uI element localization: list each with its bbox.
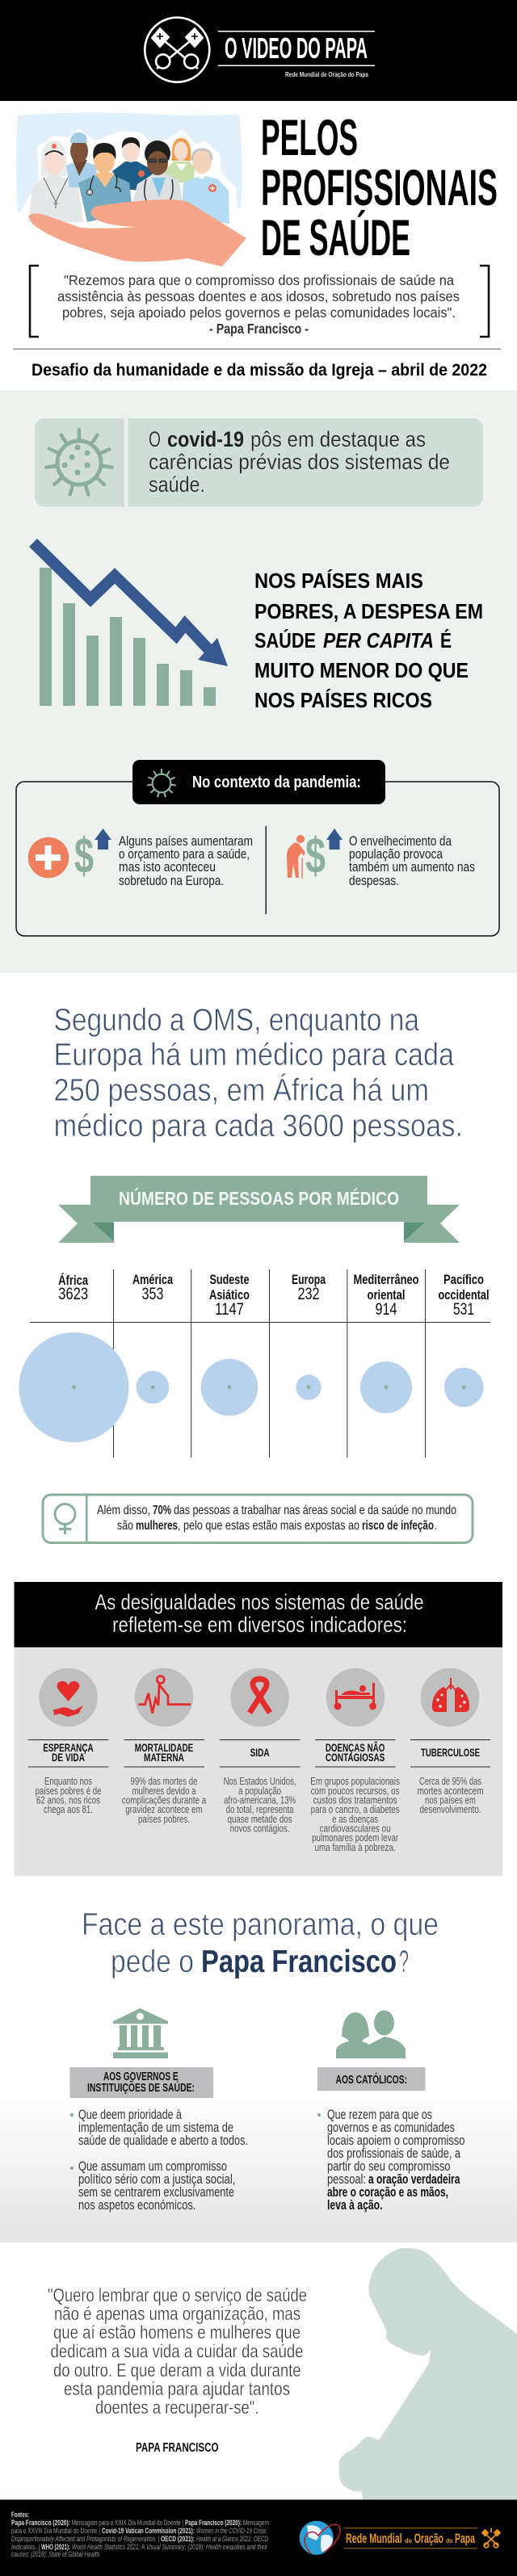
indicator: sida: afro-americana, 13% (224, 1794, 296, 1806)
sources: Fontes: (11, 2511, 29, 2519)
closing quote: PAPA FRANCISCO (136, 2441, 219, 2455)
indicator: doenças não contagiosas: e as doenças (332, 1814, 378, 1825)
text: ageing: população provoca (349, 847, 443, 862)
logo wordmark: O VIDEO DO PAPA (225, 31, 368, 65)
indicator: tuberculose: Cerca de 95% das (419, 1776, 481, 1787)
chart: people per doctor by region: 3623 (58, 1285, 88, 1303)
indicator: doenças não contagiosas: cardiovasculares ou (320, 1823, 391, 1835)
text: budget: sobretudo na Europa. (119, 874, 224, 888)
indicator: mortalidade materna: MATERNA (144, 1752, 184, 1764)
closing quote: doentes a recuperar-se". (95, 2397, 258, 2418)
statement: doctors per person: médico para cada 3600 pessoas. (53, 1109, 463, 1143)
icon: ageing population cost up (287, 829, 343, 884)
callout: women in health workforce: risco de infeção (362, 1519, 434, 1533)
indicator: sida: novos contágios. (230, 1823, 290, 1835)
callout: women in health workforce: , pelo que estas estão mais expostas ao (178, 1519, 359, 1533)
panel: what the Pope asks (0, 1907, 517, 2242)
heading: spending per capita: NOS PAÍSES MAIS (254, 568, 423, 593)
prayer intention quote in brackets: "Rezemos para que o compromisso dos profissionais de saúde na (64, 272, 454, 288)
statement: doctors per person: 250 pessoas, em África há um (53, 1073, 429, 1108)
chart: people per doctor by region: 531 (453, 1300, 474, 1319)
covid text: O (149, 427, 161, 451)
indicator: esperança de vida: 62 anos, nos ricos (36, 1794, 100, 1806)
indicator: sida: do total, representa (226, 1804, 294, 1815)
indicator: tuberculose: desenvolvimento. (420, 1804, 481, 1815)
section heading: Papa Francisco (201, 1945, 397, 1979)
heading: spending per capita: NOS PAÍSES RICOS (254, 688, 432, 712)
list: requests to catholics (317, 2108, 465, 2213)
callout: covid-19 (35, 418, 483, 507)
chart: people per doctor by region: Mediterrâneo (354, 1272, 418, 1287)
panel heading: refletem-se em diversos indicadores: (112, 1613, 407, 1637)
indicator: tuberculose: nos países em (425, 1794, 476, 1806)
sources: para o XXVIII Dia Mundial do Doente | (11, 2527, 100, 2535)
closing quote: esta pandemia para ajudar tantos (64, 2378, 290, 2399)
statement: doctors per person: Europa há um médico para cada (53, 1038, 454, 1072)
indicator: esperança de vida: chega aos 81. (44, 1804, 93, 1815)
indicator: tuberculose: TUBERCULOSE (421, 1747, 480, 1759)
list: requests to catholics: a oração verdadeira (368, 2172, 460, 2187)
heading: spending per capita: PER CAPITA (323, 628, 434, 652)
prayer intention quote in brackets: - Papa Francisco - (209, 321, 309, 337)
label: governments: AOS GOVERNOS E (103, 2070, 179, 2083)
logo wordmark: Rede Mundial de Oração do Papa (285, 70, 368, 78)
indicator: mortalidade materna: 99% das mortes de (131, 1776, 198, 1787)
logo: Rede Mundial de Oração do Papa (300, 2521, 500, 2555)
sources: Mensagem para o XXIX Dia Mundial do Doente | (72, 2519, 183, 2527)
pill heading: No contexto da pandemia: (192, 774, 361, 791)
closing quote: não é apenas uma organização, mas (54, 2303, 301, 2324)
indicator: sida: quase metade dos (228, 1814, 292, 1825)
sources (11, 2511, 269, 2558)
indicator: mortalidade materna: MORTALIDADE (135, 1742, 193, 1754)
sources: Covid-19 Vatican Commission (2021): (102, 2527, 195, 2535)
icon: health budget up (28, 829, 111, 884)
closing quote: do outro. E que deram a vida durante (53, 2360, 301, 2381)
list: requests to governments: político sério com a justiça social, (78, 2172, 235, 2187)
chart: people per doctor by region: 232 (297, 1285, 320, 1303)
sources: Mensagem (243, 2519, 269, 2527)
indicator: esperança de vida (28, 1668, 108, 1815)
logo wordmark (218, 31, 375, 78)
indicator: doenças não contagiosas: custos dos tratamentos (313, 1794, 397, 1806)
doctor with cap (66, 132, 97, 187)
sources: Indicators. | (11, 2543, 40, 2551)
sources: WHO (2021): (41, 2543, 70, 2551)
icon: health budget up: $ (74, 829, 94, 884)
list: requests to catholics: leva à ação. (327, 2198, 383, 2213)
list: requests to catholics: dos profissionais de saúde, a (327, 2146, 461, 2161)
chart: people per doctor by region (19, 1269, 490, 1458)
text: budget: Alguns países aumentaram (119, 834, 253, 849)
section heading (82, 1907, 439, 1979)
chart: people per doctor by region: Europa (292, 1272, 326, 1287)
list: requests to catholics: partir do seu compromisso (327, 2159, 451, 2174)
nurse nun (28, 141, 83, 222)
sources: OECD (2021): (161, 2535, 195, 2543)
chart: people per doctor by region: Asiático (209, 1287, 250, 1303)
icon: ageing population cost up: $ (305, 829, 326, 884)
closing quote: dedicam a sua vida a cuidar da saúde (50, 2340, 304, 2361)
indicator: sida: Nos Estados Unidos, (224, 1776, 296, 1787)
sources: World Health Statistics 2021: A Visual Summary; (2018): Health inequities and their (72, 2543, 268, 2551)
list: requests to governments (70, 2108, 248, 2213)
panel: no contexto da pandemia (16, 760, 499, 936)
doctor with stethoscope (78, 143, 132, 222)
statement: doctors per person: Segundo a OMS, enquanto na (53, 1003, 419, 1038)
subtitle: Desafio da humanidade e da missão da Igreja – abril de 2022 (32, 361, 487, 380)
chart: people per doctor by region: 914 (375, 1300, 397, 1319)
section heading: Face a este panorama, o que (82, 1907, 439, 1942)
chart: people per doctor by region: 1147 (215, 1300, 244, 1319)
older priest doctor (182, 149, 229, 224)
logo: Rede Mundial de Oração do Papa: do (405, 2537, 412, 2545)
label: governments: INSTITUIÇÕES DE SAÚDE: (87, 2080, 195, 2095)
panel: covid context (0, 390, 517, 973)
hand (28, 199, 246, 266)
indicator: esperança de vida: DE VIDA (52, 1752, 85, 1764)
chart: people per doctor by region: África (58, 1273, 89, 1288)
sources: Papa Francisco (2020): (11, 2519, 70, 2527)
title: DE SAÚDE (261, 210, 410, 266)
prayer intention quote in brackets: pobres, seja apoiado pelos governos e pelas comunidades locais". (62, 304, 456, 321)
icon: catholics silhouettes (336, 2011, 406, 2058)
chart: people per doctor by region: 353 (142, 1285, 163, 1303)
logo: Rede Mundial de Oração do Papa: Rede Mundial (346, 2531, 402, 2546)
indicator: esperança de vida: países pobres é de (36, 1785, 102, 1797)
closing quote: que aí estão homens e mulheres que (53, 2322, 301, 2343)
text: ageing: despesas. (349, 874, 399, 888)
text: ageing: também um aumento nas (349, 860, 475, 875)
ribbon heading (58, 1176, 460, 1243)
indicator: esperança de vida: ESPERANÇA (43, 1742, 94, 1754)
callout: women in health workforce: . (435, 1519, 437, 1533)
indicator: sida (220, 1668, 300, 1835)
chart: people per doctor by region: América (132, 1272, 173, 1287)
indicator: mortalidade materna: países pobres. (138, 1814, 190, 1825)
indicator: sida: SIDA (250, 1747, 270, 1759)
illustration: health workers held in a hand (16, 112, 246, 266)
covid text: saúde. (149, 472, 205, 497)
heading: spending per capita: SAÚDE (254, 628, 316, 652)
text: budget: mas isto aconteceu (119, 860, 216, 875)
icon: venus symbol (55, 1504, 75, 1534)
ribbon heading: NÚMERO DE PESSOAS POR MÉDICO (119, 1187, 399, 1209)
list: requests to governments: Que assumam um compromisso (78, 2159, 227, 2174)
indicator: doenças não contagiosas: uma família à pobreza. (315, 1842, 396, 1853)
indicator: tuberculose (410, 1668, 490, 1815)
heading: spending per capita: MUITO MENOR DO QUE (254, 658, 469, 682)
list: requests to governments: Que deem prioridade à (78, 2108, 183, 2122)
indicator: doenças não contagiosas: Em grupos populacionais (310, 1776, 400, 1787)
header band (0, 0, 517, 101)
indicator: mortalidade materna: mulheres devido a (132, 1785, 196, 1797)
indicator: mortalidade materna (122, 1668, 206, 1825)
indicator: doenças não contagiosas: pulmonares podem levar (312, 1832, 398, 1844)
chart: people per doctor by region: Pacífico (443, 1272, 484, 1287)
closing quote (48, 2284, 307, 2455)
indicator: doenças não contagiosas: CONTAGIOSAS (326, 1752, 385, 1764)
panel heading (15, 1582, 502, 1647)
prayer intention quote in brackets (30, 266, 489, 337)
indicator: mortalidade materna: gravidez acontece em (125, 1804, 203, 1815)
text: ageing: O envelhecimento da (349, 834, 452, 849)
label: catholics (317, 2067, 425, 2091)
covid text: carências prévias dos sistemas de (149, 450, 450, 474)
footer (0, 2499, 517, 2576)
indicator: doenças não contagiosas (310, 1668, 400, 1853)
text: ageing (349, 834, 475, 888)
sources: causes; (2018): State of Global Health. (11, 2550, 101, 2558)
chart: people per doctor by region: occidental (438, 1287, 490, 1303)
icon: government building (113, 2008, 168, 2058)
callout: women in health workforce: mulheres (136, 1519, 178, 1533)
covid text (149, 427, 450, 497)
indicator: doenças não contagiosas: com poucos recursos, os (311, 1785, 400, 1797)
label: catholics: AOS CATÓLICOS: (336, 2072, 407, 2087)
logo: Rede Mundial de Oração do Papa: Oração (414, 2531, 443, 2546)
indicator: tuberculose: mortes acontecem (417, 1785, 483, 1797)
silhouette of the Pope praying (339, 2248, 517, 2500)
indicator: doenças não contagiosas: DOENÇAS NÃO (326, 1742, 385, 1754)
sources: Papa Francisco (2020): (185, 2519, 242, 2527)
callout: women in health workforce: 70% (153, 1504, 171, 1517)
title (261, 110, 498, 266)
list: requests to governments: saúde de qualidade e aberto a todos. (78, 2133, 248, 2148)
panel heading: As desigualdades nos sistemas de saúde (95, 1590, 423, 1614)
indicator: doenças não contagiosas: para o cancro, a diabetes (311, 1804, 400, 1815)
navy doctor (112, 137, 153, 194)
section heading: ? (399, 1945, 409, 1979)
heading: spending per capita: É (440, 628, 452, 652)
list: requests to catholics: abre o coração e as mãos, (327, 2185, 448, 2200)
sources: Health at a Glance 2021: OECD (196, 2535, 268, 2543)
callout: women in health workforce: são (117, 1519, 133, 1533)
logo: Rede Mundial de Oração do Papa: do (446, 2537, 453, 2545)
list: requests to catholics: governos e as comunidades (327, 2121, 455, 2135)
indicator: sida: a população (238, 1785, 281, 1797)
statement: doctors per person (53, 1003, 463, 1143)
sources: Disproportionately Affected and Protagonists of Regeneration. | (11, 2535, 160, 2543)
heading: spending per capita (254, 568, 483, 712)
text: budget (119, 834, 253, 888)
doctor with glasses (132, 141, 183, 207)
closing quote: "Quero lembrar que o serviço de saúde (48, 2284, 307, 2305)
callout: women in health workforce (43, 1495, 473, 1542)
orange haired doctor (164, 138, 195, 183)
covid text: pôs em destaque as (250, 427, 426, 451)
covid text: covid-19 (167, 427, 244, 451)
callout: women in health workforce: Além disso, (97, 1504, 150, 1517)
heading: spending per capita: POBRES, A DESPESA EM (254, 599, 483, 623)
list: requests to catholics: locais apoiem o compromisso (327, 2133, 465, 2148)
list: requests to governments: implementação de um sistema de (78, 2121, 233, 2135)
title: PELOS (261, 110, 358, 166)
chart: people per doctor by region: Sudeste (210, 1272, 249, 1287)
icon: crossed keys logo (145, 18, 209, 82)
icon: virus (46, 430, 112, 494)
list: requests to governments: nos aspetos económicos. (78, 2198, 195, 2213)
section heading: pede o (111, 1945, 194, 1979)
list: requests to catholics: pessoal: (327, 2172, 366, 2187)
prayer intention quote in brackets: assistência às pessoas doentes e aos idosos, sobretudo nos países (57, 288, 460, 304)
chart: falling bars with arrow (33, 543, 228, 706)
pill heading (132, 760, 385, 804)
indicator: esperança de vida: Enquanto nos (44, 1776, 92, 1787)
list: requests to catholics: Que rezem para que os (327, 2108, 432, 2122)
logo: Rede Mundial de Oração do Papa: Papa (455, 2531, 475, 2546)
sources: Women in the COVID-19 Crisis: (196, 2527, 267, 2535)
panel: health inequalities indicators (15, 1582, 502, 1876)
indicator: mortalidade materna: complicações durante a (122, 1794, 206, 1806)
chart: people per doctor by region: oriental (367, 1287, 406, 1303)
label: governments (69, 2067, 213, 2098)
list: requests to governments: sem se centrarem exclusivamente (78, 2185, 234, 2200)
text: budget: o orçamento para a saúde, (119, 847, 250, 862)
